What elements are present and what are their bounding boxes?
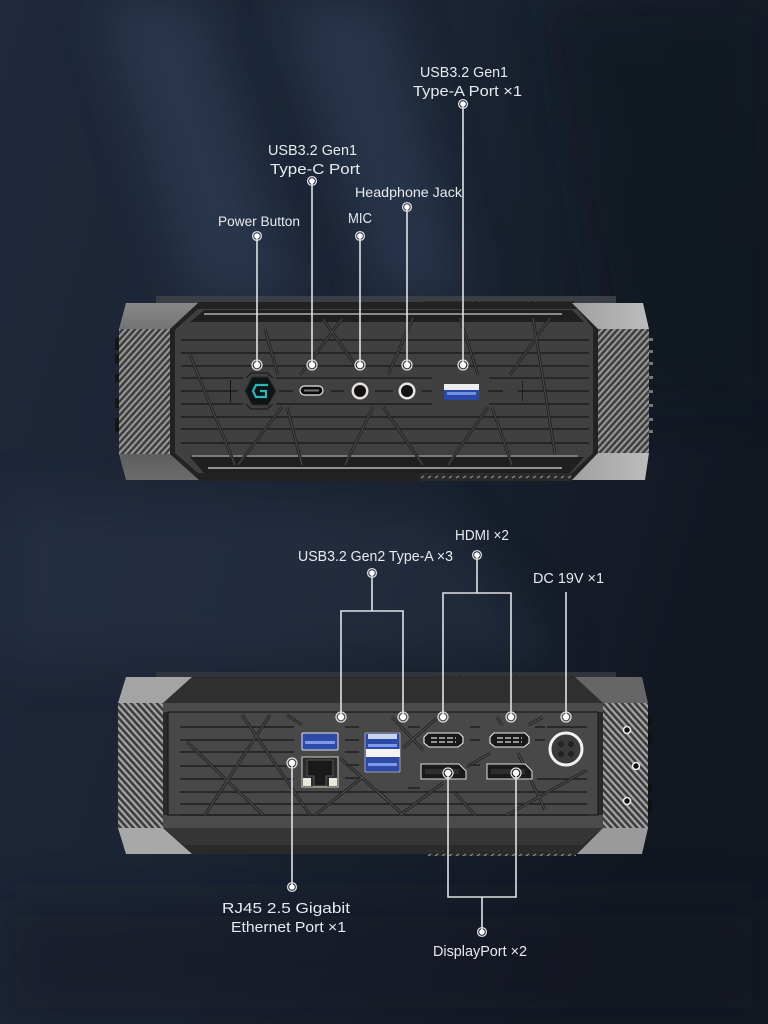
- port: USB-A single: [302, 733, 338, 750]
- grooved panel: [175, 309, 593, 473]
- port: USB-A: [444, 384, 479, 400]
- port: DC power: [550, 733, 582, 765]
- port: USB-C: [300, 386, 323, 395]
- label: Headphone Jack: Headphone Jack: [355, 184, 463, 200]
- port: headphone jack: [398, 382, 416, 400]
- label: DisplayPort x2: DisplayPort ×2: [433, 944, 527, 960]
- device: rear panel: [118, 672, 652, 856]
- callouts: front panel leaders: [252, 100, 468, 370]
- top edge strip: [156, 672, 616, 683]
- label: USB3.2 Gen1 Type-C Port: Type-C Port: [270, 162, 360, 178]
- label: RJ45 2.5 Gigabit Ethernet Port x1: RJ45 2.5 Gigabit: [222, 901, 350, 917]
- port: MIC jack: [352, 382, 368, 400]
- port: power button: [245, 377, 276, 405]
- port: HDMI 2: [490, 733, 529, 747]
- label: USB3.2 Gen1 Type-A Port x1: USB3.2 Gen1: [420, 65, 508, 81]
- port: HDMI 1: [424, 733, 463, 747]
- top edge strip: [156, 296, 616, 308]
- port: RJ45: [302, 757, 338, 787]
- bottom edge strip: [420, 473, 572, 481]
- label: DC 19V x1: DC 19V ×1: [533, 571, 604, 587]
- device: front panel: [115, 296, 653, 481]
- grooved panel: [168, 712, 598, 815]
- label: USB3.2 Gen1 Type-C Port: USB3.2 Gen1: [268, 143, 357, 159]
- right end cap: [575, 677, 652, 854]
- callouts: rear panel leaders: [287, 551, 571, 936]
- body shell: [170, 302, 598, 481]
- label: MIC: MIC: [348, 211, 372, 227]
- label: USB3.2 Gen2 Type-A x3: USB3.2 Gen2 Type-A ×3: [298, 549, 453, 565]
- port: USB-A double: [365, 733, 400, 772]
- right end cap: [572, 303, 653, 480]
- left end cap: [115, 303, 199, 480]
- body shell: [163, 677, 603, 854]
- left end cap: [118, 677, 192, 854]
- label: Power Button: Power Button: [218, 214, 300, 229]
- port: DisplayPort 1: [421, 764, 466, 779]
- label: HDMI x2: HDMI ×2: [455, 528, 509, 544]
- label: RJ45 2.5 Gigabit Ethernet Port x1: Ethernet Port ×1: [231, 920, 346, 936]
- label: USB3.2 Gen1 Type-A Port x1: Type-A Port ×1: [413, 84, 522, 100]
- port: DisplayPort 2: [487, 764, 532, 779]
- bottom edge strip: [428, 850, 576, 856]
